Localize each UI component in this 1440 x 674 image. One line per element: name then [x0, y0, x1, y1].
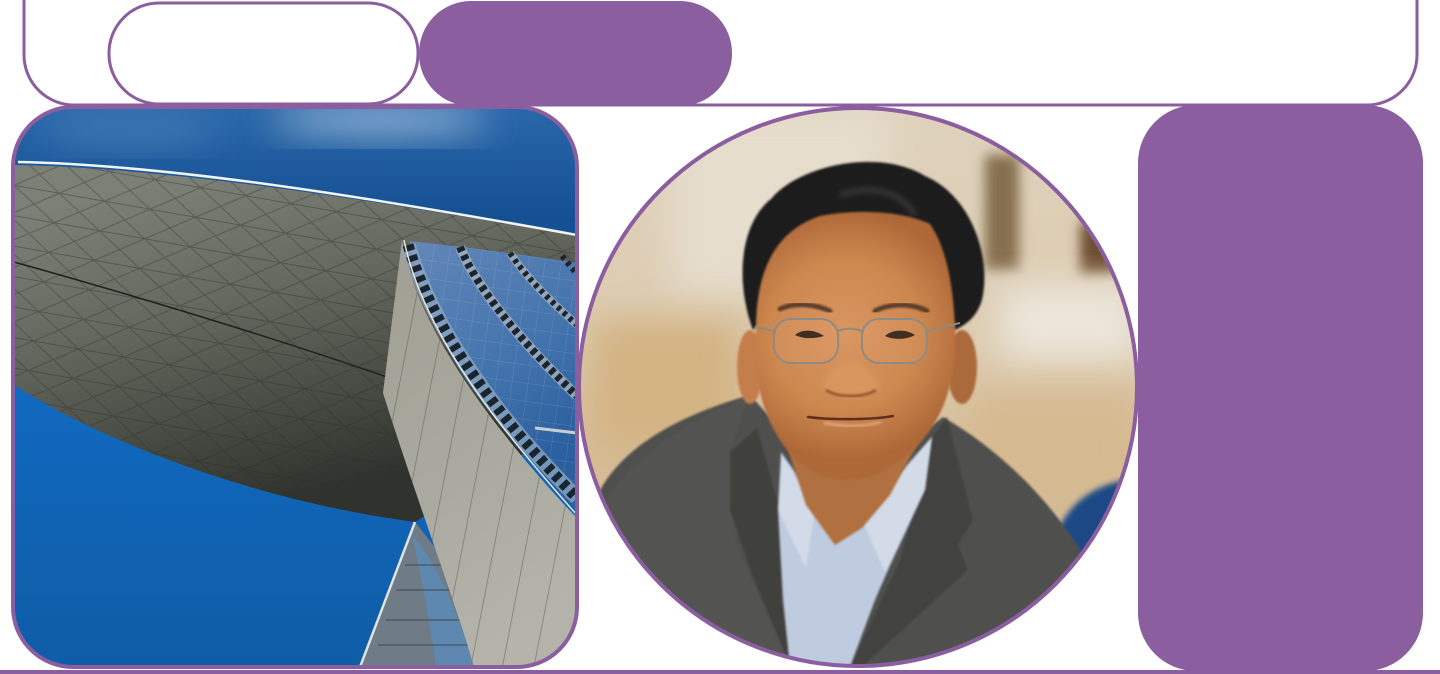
tower lower glass	[360, 522, 474, 667]
jacket	[600, 395, 1082, 674]
filled pill	[419, 1, 732, 106]
brows	[780, 305, 927, 311]
tower wall	[383, 240, 577, 667]
shirt	[778, 437, 932, 667]
hair	[743, 162, 984, 330]
glasses	[755, 319, 960, 363]
blue chair	[1059, 476, 1120, 552]
neck	[787, 444, 918, 546]
hair highlight	[840, 190, 915, 215]
panel: right purple block	[1138, 105, 1423, 671]
ears	[737, 330, 763, 404]
face	[755, 212, 956, 480]
eyes	[795, 331, 915, 339]
smile	[808, 416, 893, 419]
outlined pill	[109, 3, 418, 104]
top rounded frame	[24, 0, 1417, 105]
tower glass facade	[404, 240, 577, 515]
nose	[825, 368, 878, 394]
panel: portrait photo	[570, 100, 1146, 674]
bottom rule	[0, 670, 1440, 674]
panel: architecture photo	[13, 104, 577, 667]
sky park underside	[14, 162, 577, 522]
